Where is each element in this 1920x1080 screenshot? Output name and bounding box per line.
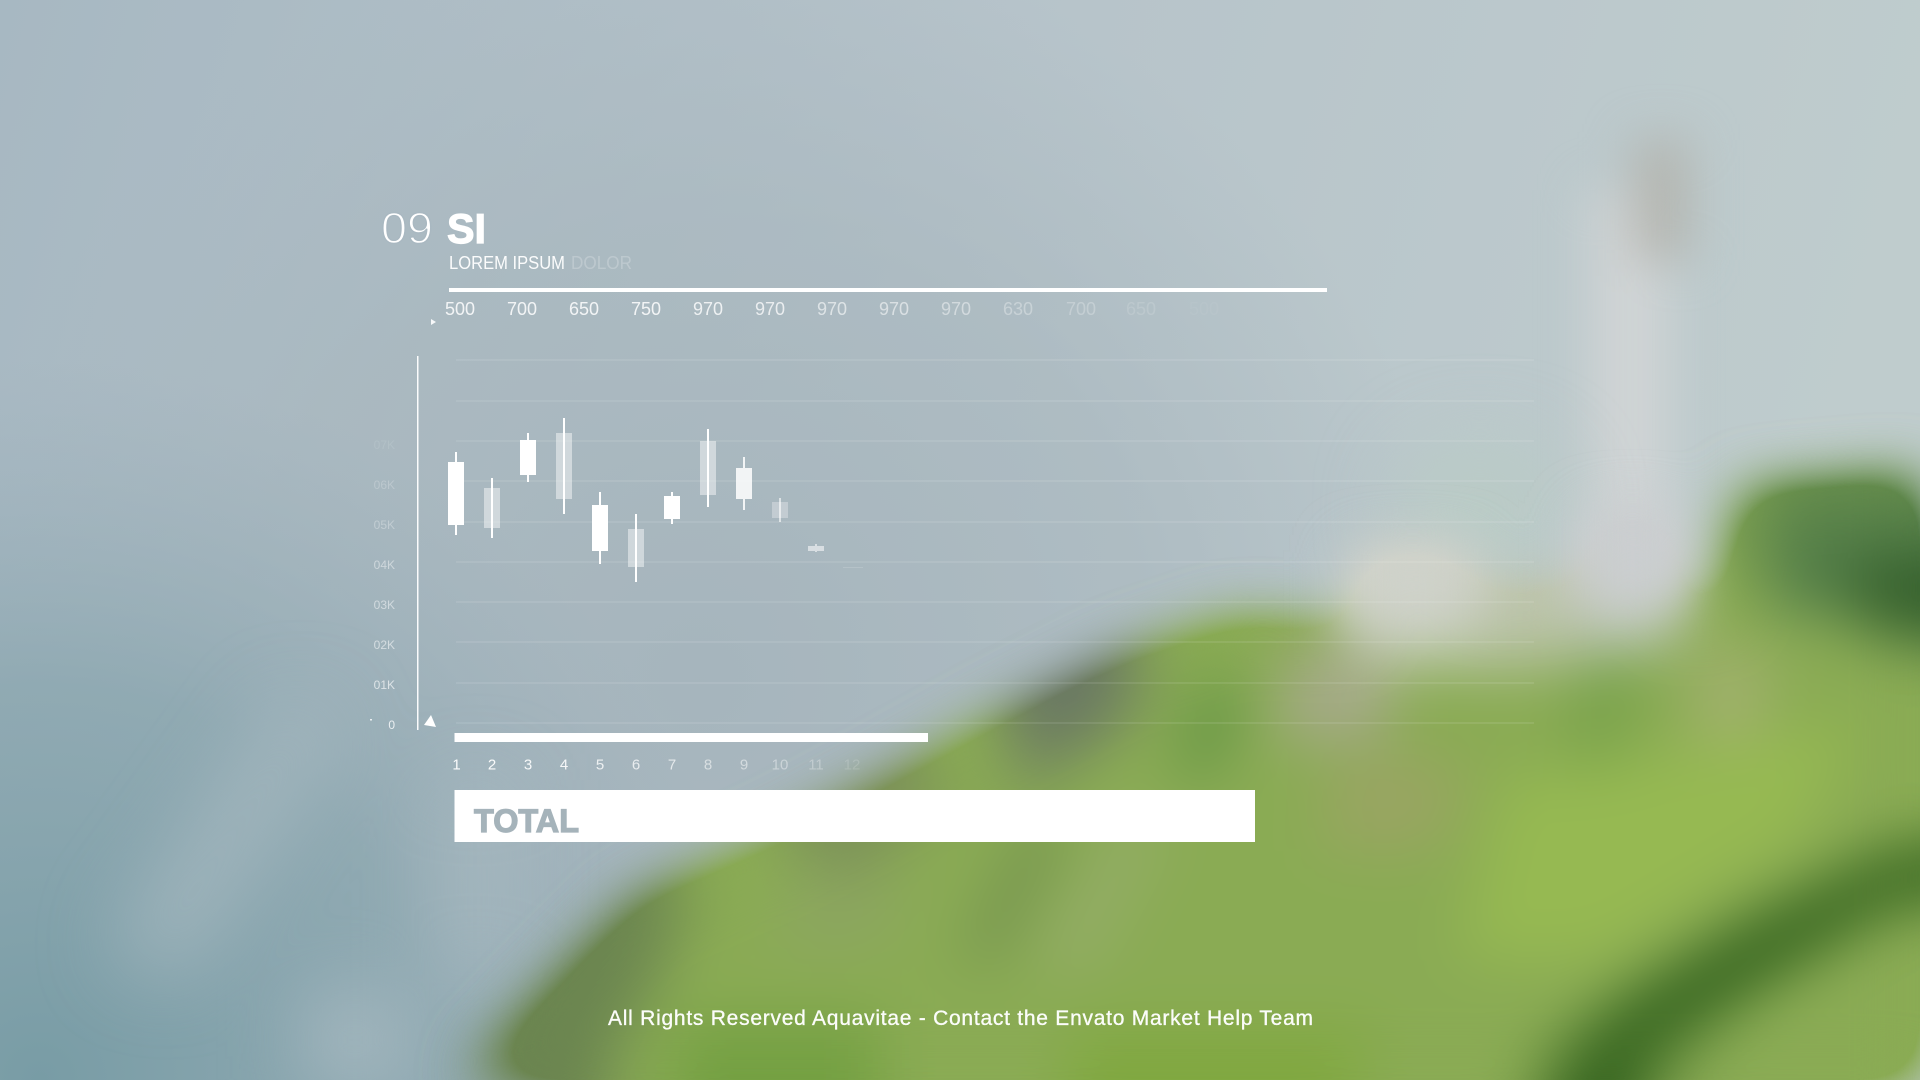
- total panel: [454, 790, 1255, 842]
- top value labels: 700: [1066, 299, 1096, 319]
- candle 4: [556, 418, 572, 514]
- title: 09 SI: 09: [381, 204, 433, 253]
- subtitle: [449, 253, 632, 273]
- total panel: TOTAL: [474, 803, 579, 839]
- y axis labels: 06K: [374, 478, 395, 492]
- subtitle: LOREM IPSUM: [449, 253, 565, 273]
- x axis labels: 8: [704, 756, 712, 774]
- y axis labels: 0: [388, 718, 395, 732]
- top value labels: [445, 299, 1219, 319]
- small tick near zero: [370, 719, 372, 720]
- candle 10: [772, 498, 788, 522]
- top value labels: 970: [817, 299, 847, 319]
- dark stripe at lower right: [1525, 835, 1920, 1080]
- top progress bar: [449, 288, 1327, 292]
- title: 09 SI: [381, 204, 486, 253]
- top value labels: 500: [445, 299, 475, 319]
- x axis labels: 11: [808, 756, 824, 774]
- chart grid lines: [456, 360, 1534, 723]
- subtitle: DOLOR: [571, 253, 632, 273]
- y axis labels: 02K: [374, 638, 395, 652]
- x axis labels: 4: [560, 756, 568, 774]
- tan patches: [1280, 660, 1390, 740]
- top value labels: 970: [879, 299, 909, 319]
- x axis labels: 10: [772, 756, 788, 774]
- x axis labels: [452, 756, 860, 774]
- bright grass: [1460, 720, 1860, 960]
- y axis labels: 01K: [374, 678, 395, 692]
- title: 09 SI: SI: [447, 205, 486, 252]
- waves: [110, 700, 510, 1080]
- x axis labels: 1: [452, 756, 461, 774]
- candle 12: [843, 567, 863, 568]
- top value labels: 700: [507, 299, 537, 319]
- candle 8: [700, 429, 716, 507]
- green streak: [1175, 680, 1245, 780]
- x axis labels: 5: [596, 756, 604, 774]
- candlestick chart: [448, 418, 863, 582]
- candle 9: [736, 457, 752, 510]
- x axis labels: 9: [740, 756, 748, 774]
- right dark crest: [1760, 490, 1920, 660]
- footer credit: All Rights Reserved Aquavitae - Contact the Envato Market Help Team: [608, 1007, 1313, 1030]
- tower base: [1590, 520, 1675, 645]
- top value labels: 650: [1126, 299, 1156, 319]
- y axis labels: [374, 438, 395, 732]
- y axis line: [417, 356, 418, 730]
- axis origin triangle: [424, 715, 436, 727]
- top value labels: 970: [693, 299, 723, 319]
- small marker triangle: [431, 319, 436, 325]
- candle 3: [520, 433, 536, 482]
- top value labels: 630: [1003, 299, 1033, 319]
- top value labels: 750: [631, 299, 661, 319]
- y axis labels: 07K: [374, 438, 395, 452]
- candle 5: [592, 492, 608, 564]
- white building on crest: [1355, 555, 1470, 660]
- top value labels: 500: [1189, 299, 1219, 319]
- candle 2: [484, 478, 500, 538]
- x axis labels: 7: [668, 756, 676, 774]
- x axis labels: 3: [524, 756, 532, 774]
- pale mint building haze: [1400, 445, 1560, 575]
- candle 1: [448, 452, 464, 535]
- candle 11: [808, 544, 824, 552]
- hill with blended colour patches: [470, 480, 1920, 1080]
- y axis labels: 04K: [374, 558, 395, 572]
- bottom progress bar: [454, 733, 928, 742]
- top value labels: 970: [755, 299, 785, 319]
- top value labels: 650: [569, 299, 599, 319]
- x axis labels: 6: [632, 756, 640, 774]
- y axis labels: 03K: [374, 598, 395, 612]
- dark olive edge: [470, 885, 700, 1080]
- candle 6: [628, 514, 644, 582]
- lighthouse tower: [1590, 140, 1687, 660]
- x axis labels: 2: [488, 756, 496, 774]
- x axis labels: 12: [844, 756, 860, 774]
- y axis labels: 05K: [374, 518, 395, 532]
- candle 7: [664, 492, 680, 524]
- top value labels: 970: [941, 299, 971, 319]
